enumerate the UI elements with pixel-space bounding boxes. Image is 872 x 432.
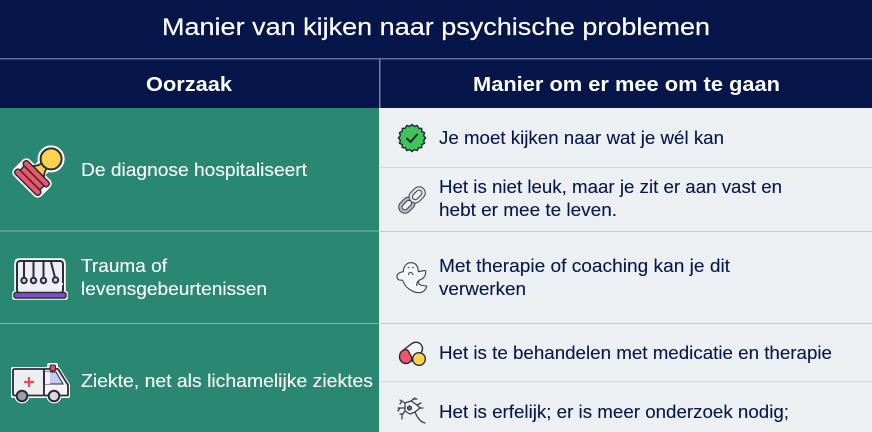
text: erfelijk: Het is erfelijk; er is meer onderzoek nodig; — [439, 402, 789, 422]
table header — [0, 58, 872, 108]
text: therapie of coaching: Met therapie of coaching kan je dit — [439, 256, 730, 276]
icon: stamp — [14, 139, 71, 196]
text: therapie of coaching — [439, 256, 730, 299]
text: vast en leven: Het is niet leuk, maar je zit er aan vast en — [439, 177, 782, 197]
icon: ambulance — [13, 365, 68, 404]
table header: Manier om er mee om te gaan — [473, 74, 780, 96]
text: de diagnose hospitaliseert: De diagnose hospitaliseert — [81, 160, 307, 180]
text: therapie of coaching: verwerken — [439, 279, 526, 299]
panel: causes column — [0, 108, 379, 432]
icon: ghost — [397, 263, 427, 293]
icon: newton's cradle — [14, 260, 66, 298]
text: vast en leven — [439, 177, 782, 220]
text: trauma of levensgebeurtenissen: levensgebeurtenissen — [81, 279, 267, 299]
icon: neuron — [398, 398, 425, 423]
icon: green check badge — [398, 124, 426, 152]
text: ziekte, net als lichamelijke ziektes: Ziekte, net als lichamelijke ziektes — [81, 371, 373, 391]
text: medicatie en therapie: Het is te behandelen met medicatie en therapie — [439, 343, 832, 363]
icon: chain — [399, 187, 425, 213]
text: wel kan: Je moet kijken naar wat je wél kan — [439, 128, 724, 148]
table header: Oorzaak — [146, 74, 233, 96]
text: vast en leven: hebt er mee te leven. — [439, 200, 617, 220]
title bar: Manier van kijken naar psychische problemen — [162, 14, 710, 41]
title bar — [0, 0, 872, 58]
text: trauma of levensgebeurtenissen: Trauma of — [81, 256, 168, 276]
panel: coping column — [380, 108, 872, 432]
text: trauma of levensgebeurtenissen — [81, 256, 267, 299]
icon: pills — [400, 342, 425, 365]
